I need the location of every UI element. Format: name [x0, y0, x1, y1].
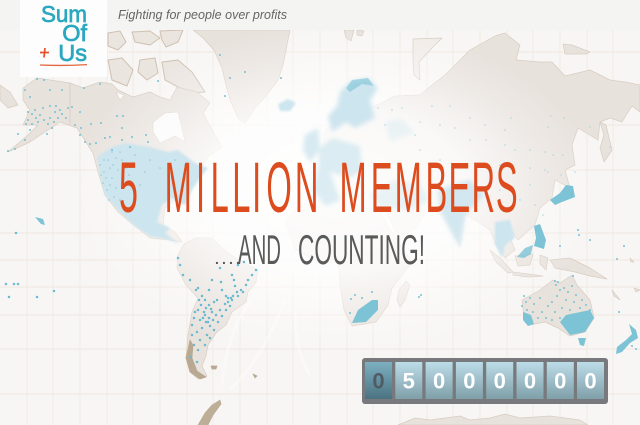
Falklands and South Georgia — [211, 366, 257, 378]
Japan — [550, 185, 575, 205]
headline: 5 million members: MEMBERS — [339, 148, 518, 227]
Canadian archipelago — [108, 30, 205, 93]
counter frame — [362, 358, 608, 404]
counter digits — [372, 368, 597, 394]
counter digits: 0 — [372, 368, 385, 394]
counter digits: 0 — [494, 368, 506, 394]
Borneo — [517, 245, 533, 258]
logo wordmark — [41, 1, 87, 66]
subheading: and counting: AND — [238, 226, 281, 273]
subheading: and counting — [215, 226, 425, 273]
tagline: Fighting for people over profits — [118, 8, 287, 22]
member dots — [8, 55, 281, 151]
counter digits: 0 — [584, 368, 597, 394]
Alaska border — [69, 83, 71, 124]
Iceland — [278, 99, 296, 111]
faint ocean current lines — [222, 300, 310, 390]
Norway coast — [346, 78, 374, 92]
counter digits: 0 — [433, 368, 445, 394]
Sakhalin — [600, 122, 612, 162]
Scandinavia — [328, 78, 378, 132]
light member regions: Eurasia — [303, 78, 485, 247]
North America — [8, 78, 222, 242]
Novaya Zemlya — [413, 38, 442, 80]
eastern Siberia tip — [0, 85, 18, 108]
Svalbard — [344, 30, 364, 41]
Pacific islands — [612, 258, 640, 300]
Patagonia — [186, 340, 206, 379]
United Kingdom — [303, 128, 320, 162]
Antarctic peninsula — [198, 400, 221, 425]
Tasmania — [578, 338, 586, 346]
counter cells — [365, 362, 604, 399]
headline: 5 million members: 5 — [119, 148, 138, 227]
South Africa — [352, 300, 378, 323]
headline: 5 million members: MILLION — [165, 148, 318, 227]
SW Australia — [523, 312, 534, 326]
United States and Mexico — [97, 143, 208, 245]
Madagascar — [397, 281, 410, 307]
Greenland — [193, 30, 290, 123]
Africa — [285, 198, 412, 326]
logo wordmark: Of — [62, 20, 87, 46]
India — [438, 180, 485, 247]
central glow — [70, 25, 600, 355]
Western Europe — [312, 138, 362, 206]
counter digits: 0 — [463, 368, 476, 394]
South America — [177, 238, 258, 379]
light member regions: Americas — [97, 99, 515, 258]
headline: 5 million members — [119, 148, 518, 227]
counter digits: 0 — [524, 368, 536, 394]
logo — [20, 0, 107, 77]
Antarctica — [398, 414, 588, 425]
Philippines — [534, 224, 546, 249]
subheading: and counting: .... — [215, 251, 243, 267]
Eastern Europe — [385, 118, 415, 142]
logo panel — [20, 0, 107, 77]
counter digits: 0 — [554, 368, 566, 394]
New Zealand — [616, 324, 638, 354]
subheading: and counting: COUNTING! — [298, 226, 425, 273]
Hawaii — [35, 217, 45, 225]
Indonesia islands — [490, 250, 607, 279]
Australia — [522, 275, 594, 336]
member counter — [362, 358, 608, 404]
logo plus sign — [40, 48, 49, 58]
SE Australia — [560, 310, 594, 335]
logo underline — [40, 64, 87, 66]
strong member regions — [35, 78, 638, 354]
counter digits: 5 — [403, 368, 415, 394]
Novosibirsk Islands — [563, 44, 590, 54]
logo wordmark: Us — [58, 40, 87, 66]
logo wordmark: Sum — [41, 1, 87, 27]
Eurasia — [320, 33, 640, 258]
South East Asia — [495, 220, 515, 258]
hudson bay and inland water — [116, 92, 185, 143]
header bar — [0, 0, 640, 30]
